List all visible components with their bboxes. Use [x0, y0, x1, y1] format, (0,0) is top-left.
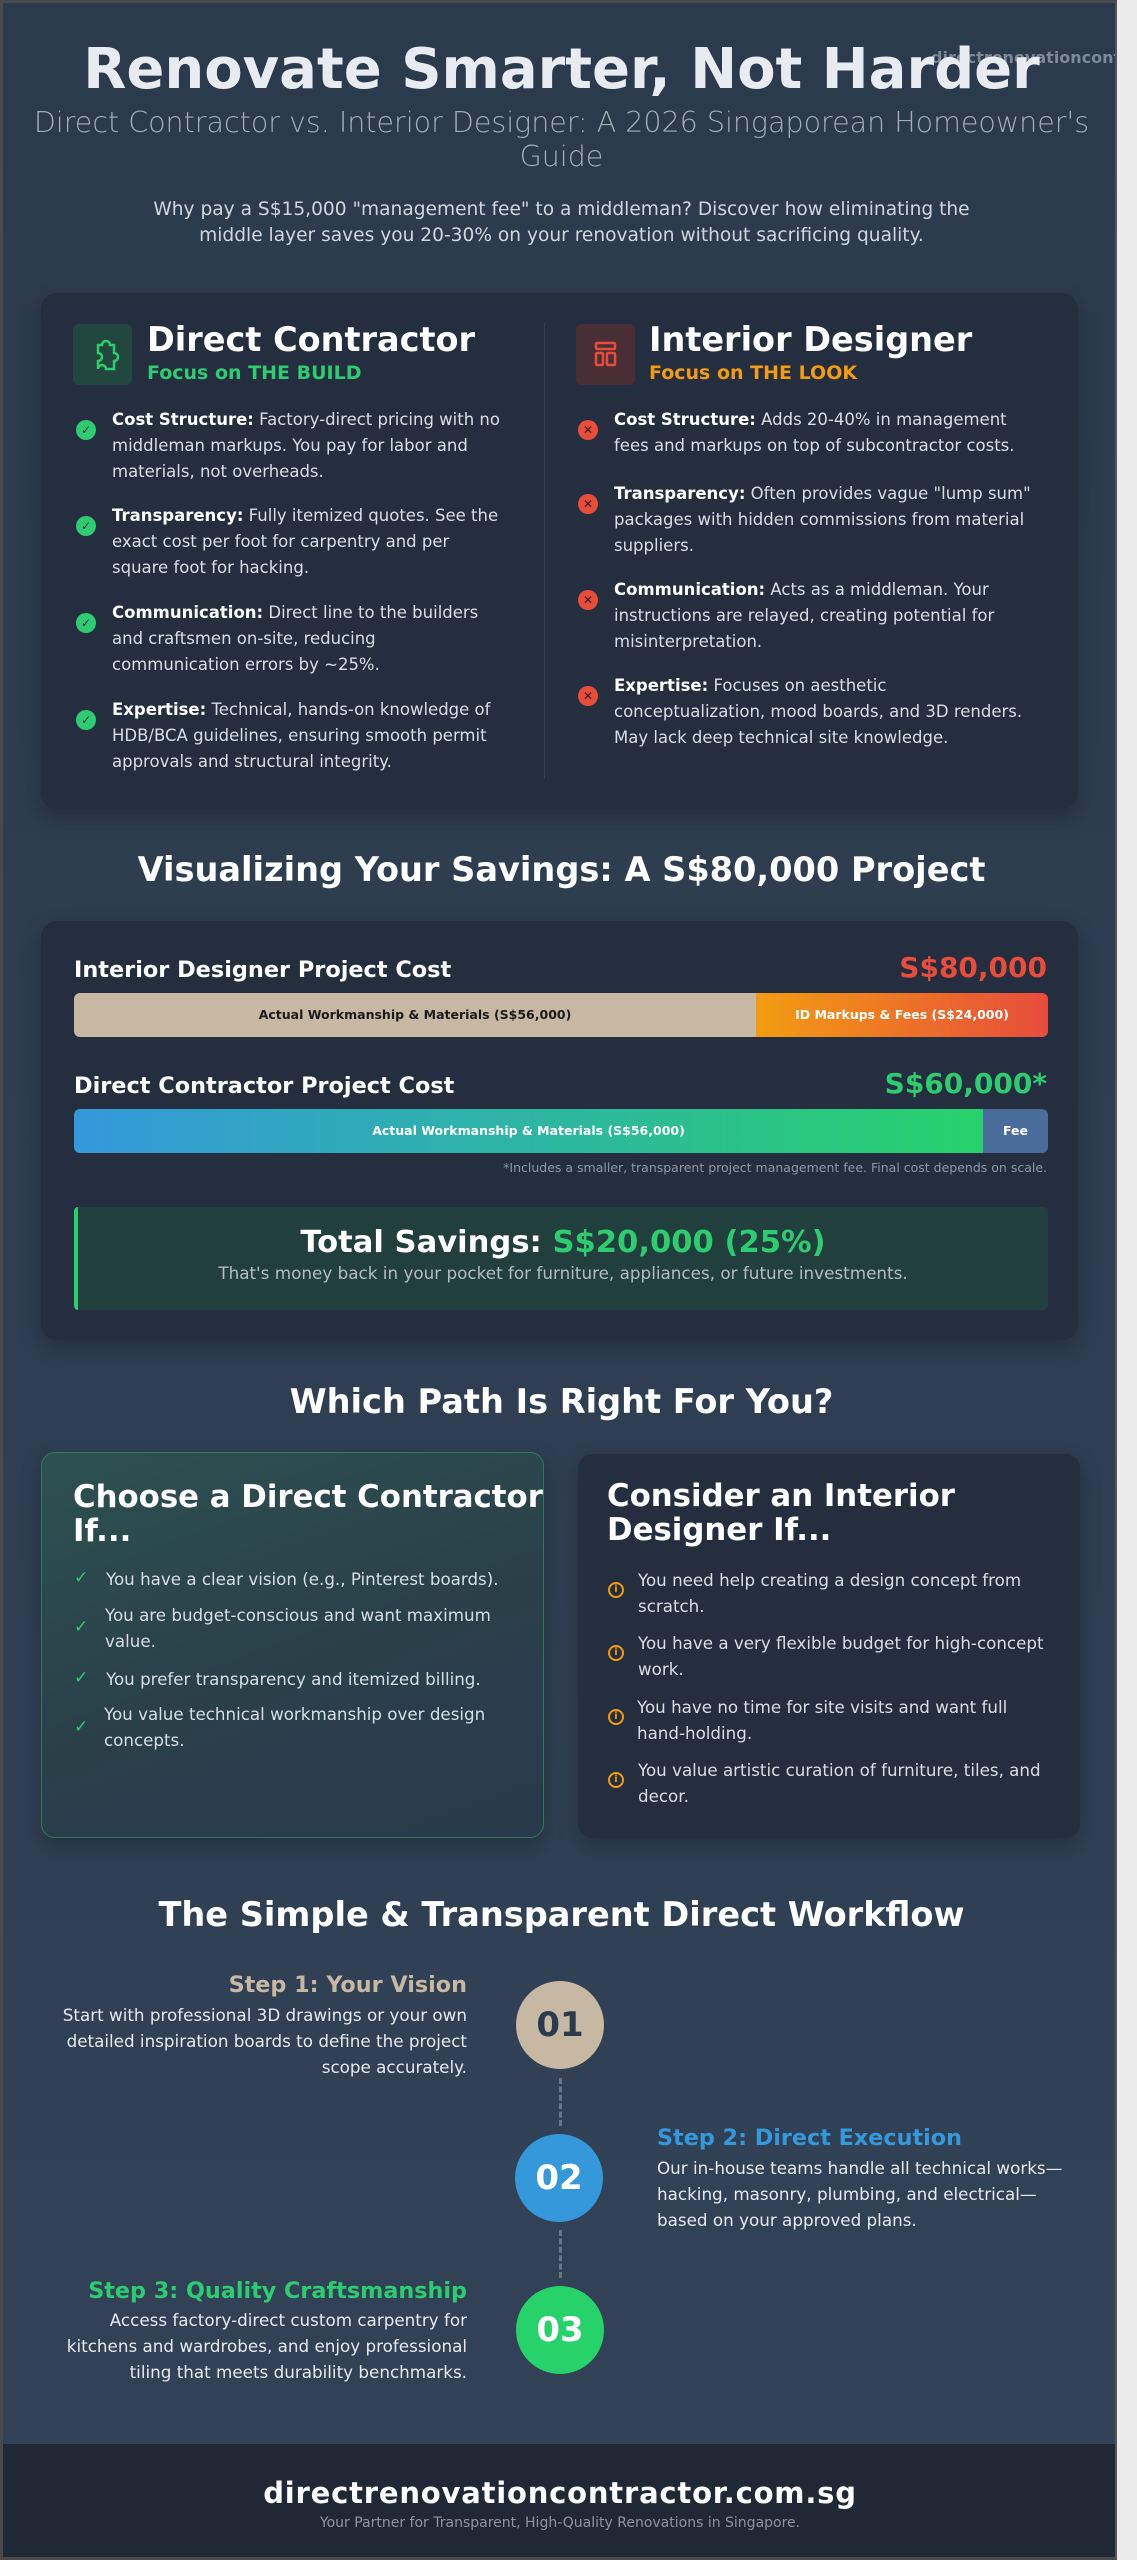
- list: contractor reasons: ✓: [74, 1617, 88, 1637]
- list: contractor pros: communication errors by ~25%.: [112, 655, 380, 674]
- footnote: *Includes a smaller, transparent project management fee. Final cost depends on scale.: [503, 1160, 1047, 1175]
- step 3 text: Access factory-direct custom carpentry for: [110, 2310, 467, 2330]
- intro text: [153, 199, 970, 246]
- step 3 text: kitchens and wardrobes, and enjoy professional: [67, 2336, 467, 2356]
- list: contractor reasons: ✓: [74, 1568, 88, 1588]
- tag: focus look: Focus on THE LOOK: [649, 362, 857, 384]
- list: contractor reasons: You have a clear vision (e.g., Pinterest boards).: [106, 1569, 499, 1589]
- list: contractor reasons: [74, 1568, 499, 1750]
- list: contractor pros: middleman markups. You pay for labor and: [112, 436, 468, 455]
- list: designer reasons: work.: [638, 1659, 684, 1679]
- list: contractor reasons: You prefer transparency and itemized billing.: [106, 1669, 481, 1689]
- step 2 text: Our in-house teams handle all technical works—: [657, 2158, 1062, 2178]
- heading: which path: Which Path Is Right For You?: [290, 1382, 833, 1421]
- list: contractor pros: materials, not overheads.: [112, 462, 324, 481]
- list: designer cons: conceptualization, mood boards, and 3D renders.: [614, 702, 1022, 721]
- list: contractor reasons: value.: [105, 1631, 156, 1651]
- list: contractor pros: ✓: [81, 713, 91, 727]
- list: designer reasons: You have no time for site visits and want full: [637, 1697, 1007, 1717]
- list: contractor pros: ✓: [81, 423, 91, 437]
- step 2 text: based on your approved plans.: [657, 2210, 917, 2230]
- step 2 text: hacking, masonry, plumbing, and electrical—: [657, 2184, 1037, 2204]
- footer url: directrenovationcontractor.com.sg: [263, 2476, 857, 2510]
- circle 02: 02: [535, 2158, 583, 2198]
- list: contractor reasons: You value technical workmanship over design: [104, 1704, 485, 1724]
- heading: workflow: The Simple & Transparent Direct Workflow: [158, 1895, 965, 1934]
- timeline connector 1: [559, 2078, 562, 2126]
- step 2 text: [657, 2158, 1062, 2230]
- circle 01: 01: [536, 2005, 584, 2045]
- list: designer reasons: decor.: [638, 1786, 689, 1806]
- step 1 text: [63, 2005, 467, 2077]
- value: 60000: S$60,000*: [885, 1067, 1047, 1100]
- list: designer cons: fees and markups on top of subcontractor costs.: [614, 436, 1015, 455]
- footer tagline: Your Partner for Transparent, High-Quality Renovations in Singapore.: [320, 2515, 800, 2531]
- circle 01: [516, 1981, 604, 2069]
- circle 03: 03: [536, 2310, 584, 2350]
- value: 80000: S$80,000: [899, 951, 1047, 984]
- list: designer cons: misinterpretation.: [614, 632, 762, 651]
- list: contractor reasons: You are budget-conscious and want maximum: [105, 1605, 491, 1625]
- list: designer cons: Communication: Acts as a middleman. Your: [614, 580, 989, 599]
- list: contractor pros: and craftsmen on-site, reducing: [112, 629, 376, 648]
- list: contractor pros: square foot for hacking.: [112, 558, 309, 577]
- heading: savings: Visualizing Your Savings: A S$80,000 Project: [138, 850, 985, 889]
- list: designer cons: Transparency: Often provides vague "lump sum": [614, 484, 1031, 503]
- list: contractor pros: [76, 410, 500, 771]
- subtitle: [34, 106, 1089, 173]
- callout: total savings: That's money back in your pocket for furniture, appliances, or future investments.: [218, 1263, 908, 1283]
- bar: DC: [74, 1109, 1048, 1153]
- list: designer cons: Expertise: Focuses on aesthetic: [614, 676, 886, 695]
- tag: focus build: Focus on THE BUILD: [147, 362, 361, 384]
- divider: [544, 323, 545, 779]
- list: contractor pros: Expertise: Technical, hands-on knowledge of: [112, 700, 490, 719]
- step 1: [63, 1972, 604, 2077]
- subtitle: Direct Contractor vs. Interior Designer: A 2026 Singaporean Homeowner's: [34, 106, 1089, 139]
- heading: Designer If...: [607, 1512, 831, 1548]
- list: contractor pros: Communication: Direct line to the builders: [112, 603, 478, 622]
- step 3 text: tiling that meets durability benchmarks.: [130, 2362, 467, 2382]
- list: designer reasons: i: [614, 1647, 618, 1658]
- step 3: [67, 2278, 604, 2382]
- list: designer reasons: scratch.: [638, 1596, 705, 1616]
- list: contractor pros: ✓: [81, 519, 91, 533]
- list: contractor pros: approvals and structural integrity.: [112, 752, 392, 771]
- step 2 title: Step 2: Direct Execution: [657, 2125, 962, 2151]
- icon: layout: [576, 324, 635, 385]
- heading: interior designer: Interior Designer: [649, 320, 972, 359]
- title: Renovate Smarter, Not Harder: [83, 37, 1040, 102]
- circle 03: [516, 2286, 604, 2374]
- heading: [73, 1479, 543, 1549]
- subtitle: Guide: [520, 140, 603, 173]
- bar: ID: [74, 993, 1048, 1037]
- list: designer cons: ✕: [583, 423, 593, 437]
- heading: Consider an Interior: [607, 1478, 955, 1514]
- heading: Choose a Direct Contractor: [73, 1479, 543, 1515]
- list: designer cons: packages with hidden commissions from material: [614, 510, 1024, 529]
- intro text: middle layer saves you 20-30% on your renovation without sacrificing quality.: [199, 225, 924, 246]
- list: contractor pros: exact cost per foot for carpentry and per: [112, 532, 449, 551]
- list: designer reasons: i: [614, 1774, 618, 1785]
- list: designer cons: Cost Structure: Adds 20-40% in management: [614, 410, 1007, 429]
- panel: savings chart: [41, 921, 1078, 1340]
- circle 02: [515, 2134, 603, 2222]
- list: designer reasons: You need help creating a design concept from: [638, 1570, 1021, 1590]
- panel: choose contractor: [41, 1452, 544, 1838]
- footer: [3, 2444, 1117, 2560]
- step 1 text: Start with professional 3D drawings or your own: [63, 2005, 467, 2025]
- list: designer cons: May lack deep technical site knowledge.: [614, 728, 948, 747]
- list: designer cons: ✕: [583, 593, 593, 607]
- list: contractor pros: Cost Structure: Factory-direct pricing with no: [112, 410, 500, 429]
- label: ID cost: Interior Designer Project Cost: [74, 957, 451, 983]
- list: designer cons: instructions are relayed, creating potential for: [614, 606, 994, 625]
- heading: [607, 1478, 955, 1548]
- list: contractor pros: HDB/BCA guidelines, ensuring smooth permit: [112, 726, 487, 745]
- label: DC cost: Direct Contractor Project Cost: [74, 1073, 454, 1099]
- list: designer reasons: [608, 1570, 1044, 1806]
- list: designer reasons: i: [614, 1711, 618, 1722]
- list: designer reasons: You value artistic curation of furniture, tiles, and: [638, 1760, 1041, 1780]
- list: designer cons: [578, 410, 1031, 747]
- step 2: [515, 2125, 1062, 2230]
- list: designer cons: ✕: [583, 689, 593, 703]
- list: contractor pros: Transparency: Fully itemized quotes. See the: [112, 506, 498, 525]
- bar: DC: Actual Workmanship & Materials (S$56,000): [372, 1123, 685, 1138]
- list: contractor reasons: ✓: [74, 1717, 88, 1737]
- list: contractor pros: ✓: [81, 616, 91, 630]
- list: designer reasons: hand-holding.: [637, 1723, 752, 1743]
- callout: total savings: Total Savings: S$20,000 (25%): [300, 1225, 826, 1260]
- step 1 text: detailed inspiration boards to define the project: [67, 2031, 467, 2051]
- bar: ID: Actual Workmanship & Materials (S$56,000): [259, 1007, 571, 1022]
- list: designer cons: suppliers.: [614, 536, 694, 555]
- bar: DC: Fee: [1003, 1123, 1028, 1138]
- intro text: Why pay a S$15,000 "management fee" to a middleman? Discover how eliminating the: [153, 199, 970, 220]
- step 1 title: Step 1: Your Vision: [229, 1972, 467, 1998]
- heading: If...: [73, 1513, 131, 1549]
- step 3 text: [67, 2310, 467, 2382]
- panel: comparison: [41, 293, 1078, 809]
- list: designer cons: ✕: [583, 497, 593, 511]
- heading: direct contractor: Direct Contractor: [147, 320, 475, 359]
- list: contractor reasons: concepts.: [104, 1730, 185, 1750]
- list: contractor reasons: ✓: [74, 1668, 88, 1688]
- callout: total savings: [74, 1207, 1048, 1310]
- list: designer reasons: You have a very flexible budget for high-concept: [638, 1633, 1044, 1653]
- panel: consider designer: [578, 1454, 1080, 1838]
- list: designer reasons: i: [614, 1584, 618, 1595]
- step 1 text: scope accurately.: [322, 2057, 467, 2077]
- icon: puzzle: [73, 324, 132, 385]
- step 3 title: Step 3: Quality Craftsmanship: [88, 2278, 467, 2304]
- timeline connector 2: [559, 2230, 562, 2278]
- bar: ID: ID Markups & Fees (S$24,000): [795, 1007, 1009, 1022]
